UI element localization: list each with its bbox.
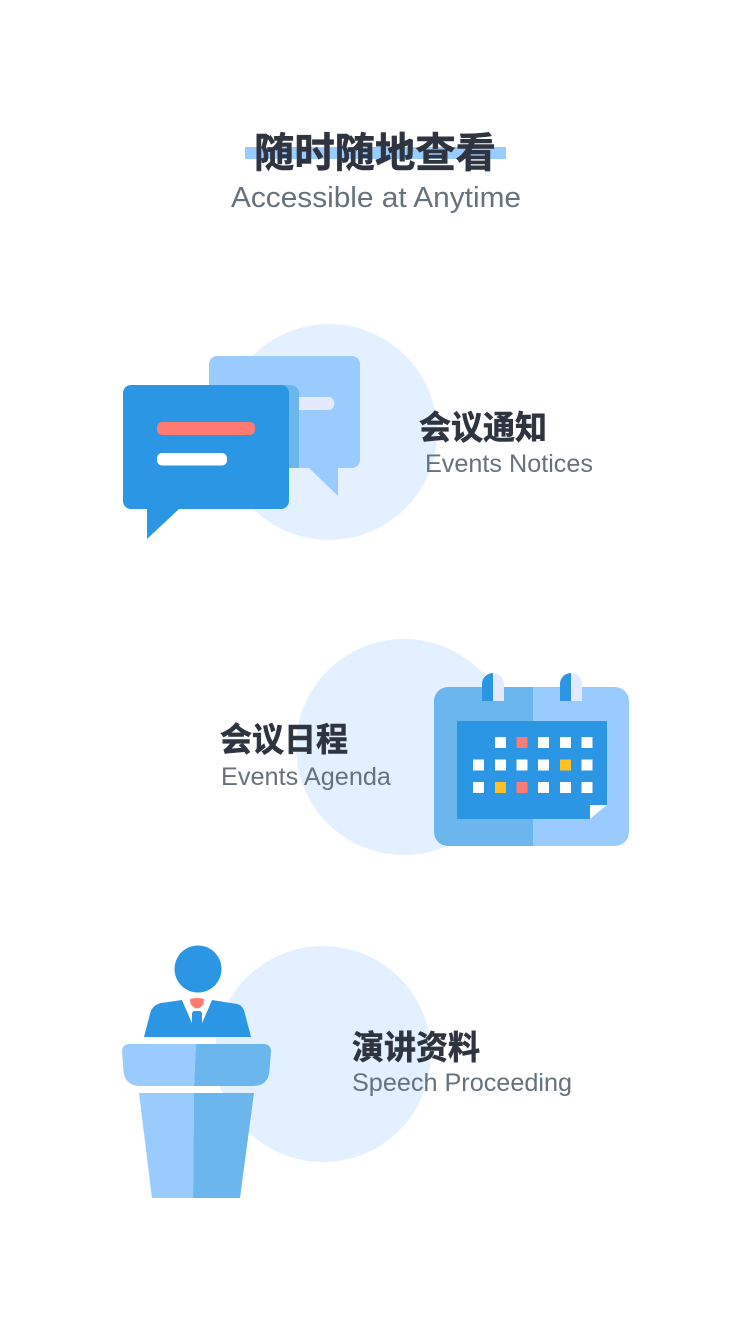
subtitle: Accessible at Anytime <box>231 182 521 214</box>
panel: speech proceeding <box>122 946 572 1198</box>
tie <box>192 1011 202 1037</box>
label: speech proceeding: Speech Proceeding <box>352 1069 572 1097</box>
background circle <box>296 639 512 855</box>
red neck <box>190 998 204 1008</box>
back speech bubble <box>209 356 360 496</box>
label: events notices: Events Notices <box>425 450 593 478</box>
background circle <box>221 324 437 540</box>
panel: events notices <box>123 324 593 540</box>
page fold <box>590 805 607 819</box>
right binder ring <box>560 673 582 701</box>
icon: speaker at podium <box>122 946 271 1198</box>
date grid <box>473 737 592 793</box>
back bubble shadow <box>209 385 299 468</box>
background circle <box>215 946 431 1162</box>
calendar body right <box>533 687 629 846</box>
speaker head <box>174 946 222 992</box>
podium top left <box>122 1044 196 1086</box>
title highlight bar <box>245 147 506 159</box>
front speech bubble <box>123 385 289 539</box>
podium base right <box>193 1093 254 1198</box>
podium base left <box>139 1093 194 1198</box>
heading: events notices: 会议通知 <box>419 409 547 446</box>
shirt collar <box>182 1000 212 1037</box>
panel: events agenda <box>220 639 629 855</box>
icon: calendar <box>434 673 629 846</box>
icon: chat bubbles <box>123 356 360 539</box>
heading: events agenda: 会议日程 <box>220 721 348 758</box>
label: events agenda: Events Agenda <box>221 763 391 791</box>
back bubble line <box>299 397 334 410</box>
speaker torso <box>144 1000 251 1037</box>
calendar body left <box>434 687 533 846</box>
title block <box>231 130 521 214</box>
red line <box>157 422 255 435</box>
white line <box>157 453 227 466</box>
heading: speech proceeding: 演讲资料 <box>352 1029 480 1066</box>
podium top right <box>194 1044 271 1086</box>
calendar page <box>457 721 607 819</box>
title: 随时随地查看 <box>254 130 496 176</box>
left binder ring <box>482 673 504 701</box>
